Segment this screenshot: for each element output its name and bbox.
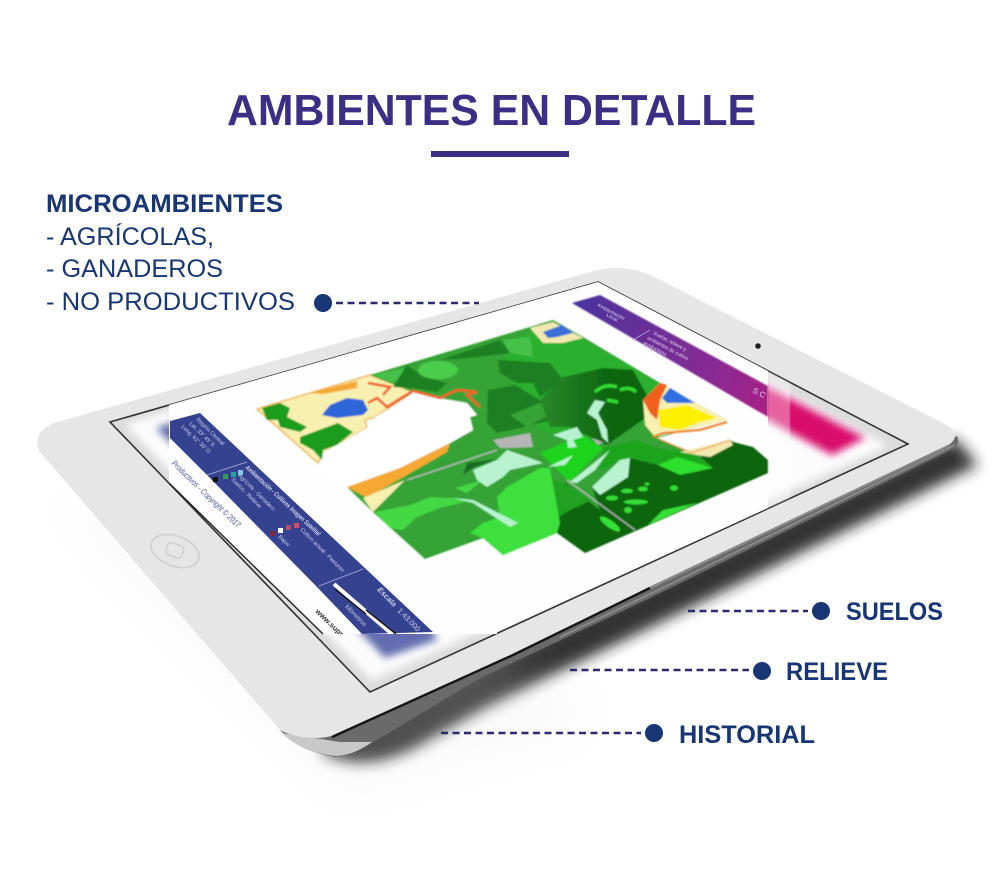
bright patch (455, 480, 483, 493)
bright diagonal field (540, 435, 603, 482)
panel: purple to pink band: ambientes de cultivo (646, 335, 689, 362)
screen edge lines (110, 282, 908, 692)
upper-right brighter field (500, 322, 660, 445)
band caption text: Cultivo actual - Pasturas (299, 527, 345, 574)
panel: purple to pink band: S C (751, 386, 767, 400)
text block: microambientes: - GANADEROS (46, 255, 223, 283)
tablet screen (110, 282, 908, 692)
band caption text: Lat. 33° 45' S (188, 421, 216, 449)
white hole (322, 392, 477, 487)
left lobe base (257, 375, 413, 463)
main green body (347, 320, 768, 559)
big bright field (470, 468, 560, 555)
tablet shadow (320, 438, 978, 762)
grey building (493, 433, 533, 448)
band caption text: 1:43.000 (396, 606, 422, 633)
pale green clearings (453, 400, 630, 527)
tablet side edge (280, 436, 958, 757)
callout: relieve (570, 658, 888, 686)
text block: microambientes: - AGRÍCOLAS, (46, 222, 214, 251)
callout: microambientes leader (314, 294, 479, 312)
silver bottom corner (282, 733, 372, 756)
bright specks on oval (595, 386, 636, 402)
icon: home button (146, 528, 204, 574)
text block: microambientes: - NO PRODUCTIVOS (46, 288, 295, 316)
legend swatches (213, 470, 299, 536)
dark green zones (393, 365, 447, 392)
top-left light patches (373, 368, 405, 383)
map: ambient zones (257, 320, 768, 559)
band caption text: kilómetros (344, 604, 367, 628)
band caption text: Escala (376, 585, 399, 608)
bright lower-left band (375, 497, 473, 530)
white map sheet (169, 282, 768, 634)
scale bar (334, 584, 396, 634)
cream lower strip (363, 480, 405, 512)
silver right edge highlight (560, 445, 955, 637)
callout: suelos: SUELOS (846, 598, 943, 626)
dark patch (463, 459, 497, 475)
faint ground shadow (60, 500, 600, 790)
left green patches (262, 403, 307, 432)
bright strip (658, 457, 713, 475)
band caption text (180, 417, 422, 633)
band dividers (207, 462, 363, 586)
callout: historial (441, 721, 815, 749)
tablet face (37, 268, 955, 738)
top right lake corner (530, 322, 583, 343)
band caption text: Suelos - Relieve (230, 477, 262, 510)
callout: historial: HISTORIAL (679, 721, 815, 749)
panel: purple to pink band: productivos (642, 340, 668, 358)
panel: blue legend band (170, 413, 433, 634)
bezel lower edge line (332, 588, 650, 737)
icon: camera (755, 343, 761, 349)
infographic canvas (37, 94, 986, 775)
text block: microambientes (46, 190, 295, 316)
callout: relieve: RELIEVE (786, 658, 888, 686)
screen white glow (125, 292, 888, 680)
mid green inside forest (553, 480, 592, 520)
text block: microambientes: MICROAMBIENTES (46, 190, 283, 218)
blurred blue band ends (156, 413, 437, 658)
callout: suelos (688, 598, 943, 626)
sheet right edge soft fade (768, 371, 790, 508)
road lines (407, 450, 635, 530)
tablet illustration (37, 268, 978, 790)
forest oval (540, 368, 648, 445)
band caption text: Agrícola - Ganadero (237, 473, 276, 512)
lower-left screen line over sheet (169, 483, 323, 634)
orange lower strip (347, 443, 450, 498)
right colourful zone (643, 383, 727, 437)
band caption text: Long. 61° 30' O (180, 424, 212, 455)
panel: purple to pink band: Local (605, 312, 618, 323)
panel: purple to pink band (572, 295, 768, 417)
notch cream strip (680, 440, 733, 457)
bright specks (598, 482, 697, 534)
orange streams (368, 383, 480, 407)
lake (322, 398, 368, 418)
title: AMBIENTES EN DETALLE (227, 86, 756, 135)
panel: purple to pink band: Ambientación (596, 302, 626, 322)
website text: www.suprag (313, 606, 352, 645)
orange top strip (310, 381, 357, 394)
panel: purple to pink band: Suelos, relieve y (652, 330, 688, 353)
dark forest (553, 442, 768, 553)
band caption text: Bajos (277, 534, 291, 548)
mid green right field (600, 440, 713, 470)
band caption text: Ambientación - Cultivos Imagen Satelital (243, 464, 322, 538)
blurred pink band end (740, 372, 865, 455)
footer copyright text: Productivos - Copyright © 2017 (170, 459, 242, 530)
title (227, 86, 756, 157)
band caption text: Región Central (195, 417, 225, 447)
